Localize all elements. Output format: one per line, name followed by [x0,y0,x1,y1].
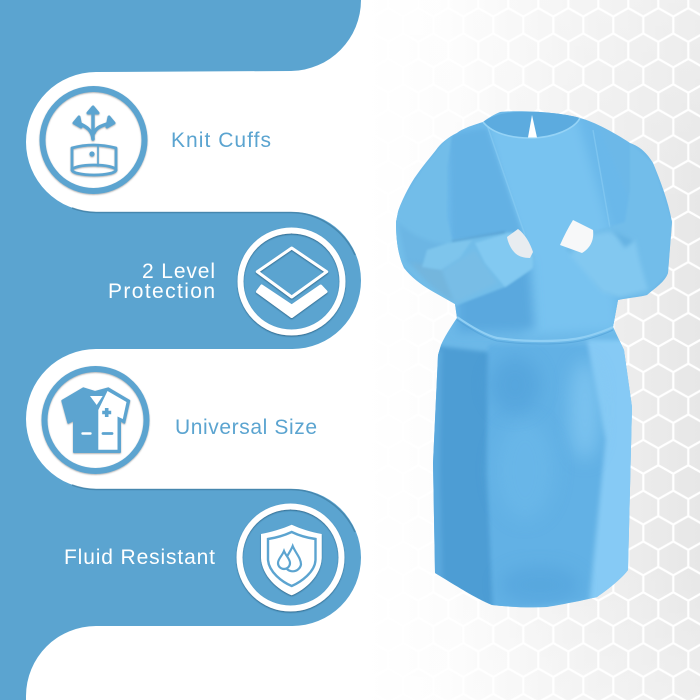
label: 2 Level Protection [108,260,215,303]
skirt panels [430,340,640,612]
row 3: universal size [44,369,317,471]
blue ribbon panel [0,0,361,700]
label: Knit Cuffs: Knit Cuffs [171,129,271,152]
right sleeve [610,162,672,296]
left white cuff [507,229,533,258]
torso [452,129,622,331]
icon: layers [240,230,342,332]
collar and neck opening [483,112,580,138]
label: 2 Level Protection: 2 Level [142,260,215,283]
row 2: 2 level protection [108,230,342,332]
icon: knit cuff with arrows [42,89,144,191]
row 1: knit cuffs [42,89,271,191]
hexagon background [340,0,700,700]
left sleeve [396,136,506,305]
gown cuffs [507,220,593,258]
icon: shield with drops [240,506,342,608]
icon: medical shirt [44,369,146,471]
row 4: fluid resistant [64,506,342,608]
label: 2 Level Protection: Protection [108,280,215,303]
ribbon edge shadows [72,208,355,532]
waist tie [457,317,613,341]
label: Universal Size: Universal Size [175,416,317,439]
label: Fluid Resistant: Fluid Resistant [64,546,215,569]
gown photo illustration [396,111,672,608]
right white cuff [560,220,593,253]
